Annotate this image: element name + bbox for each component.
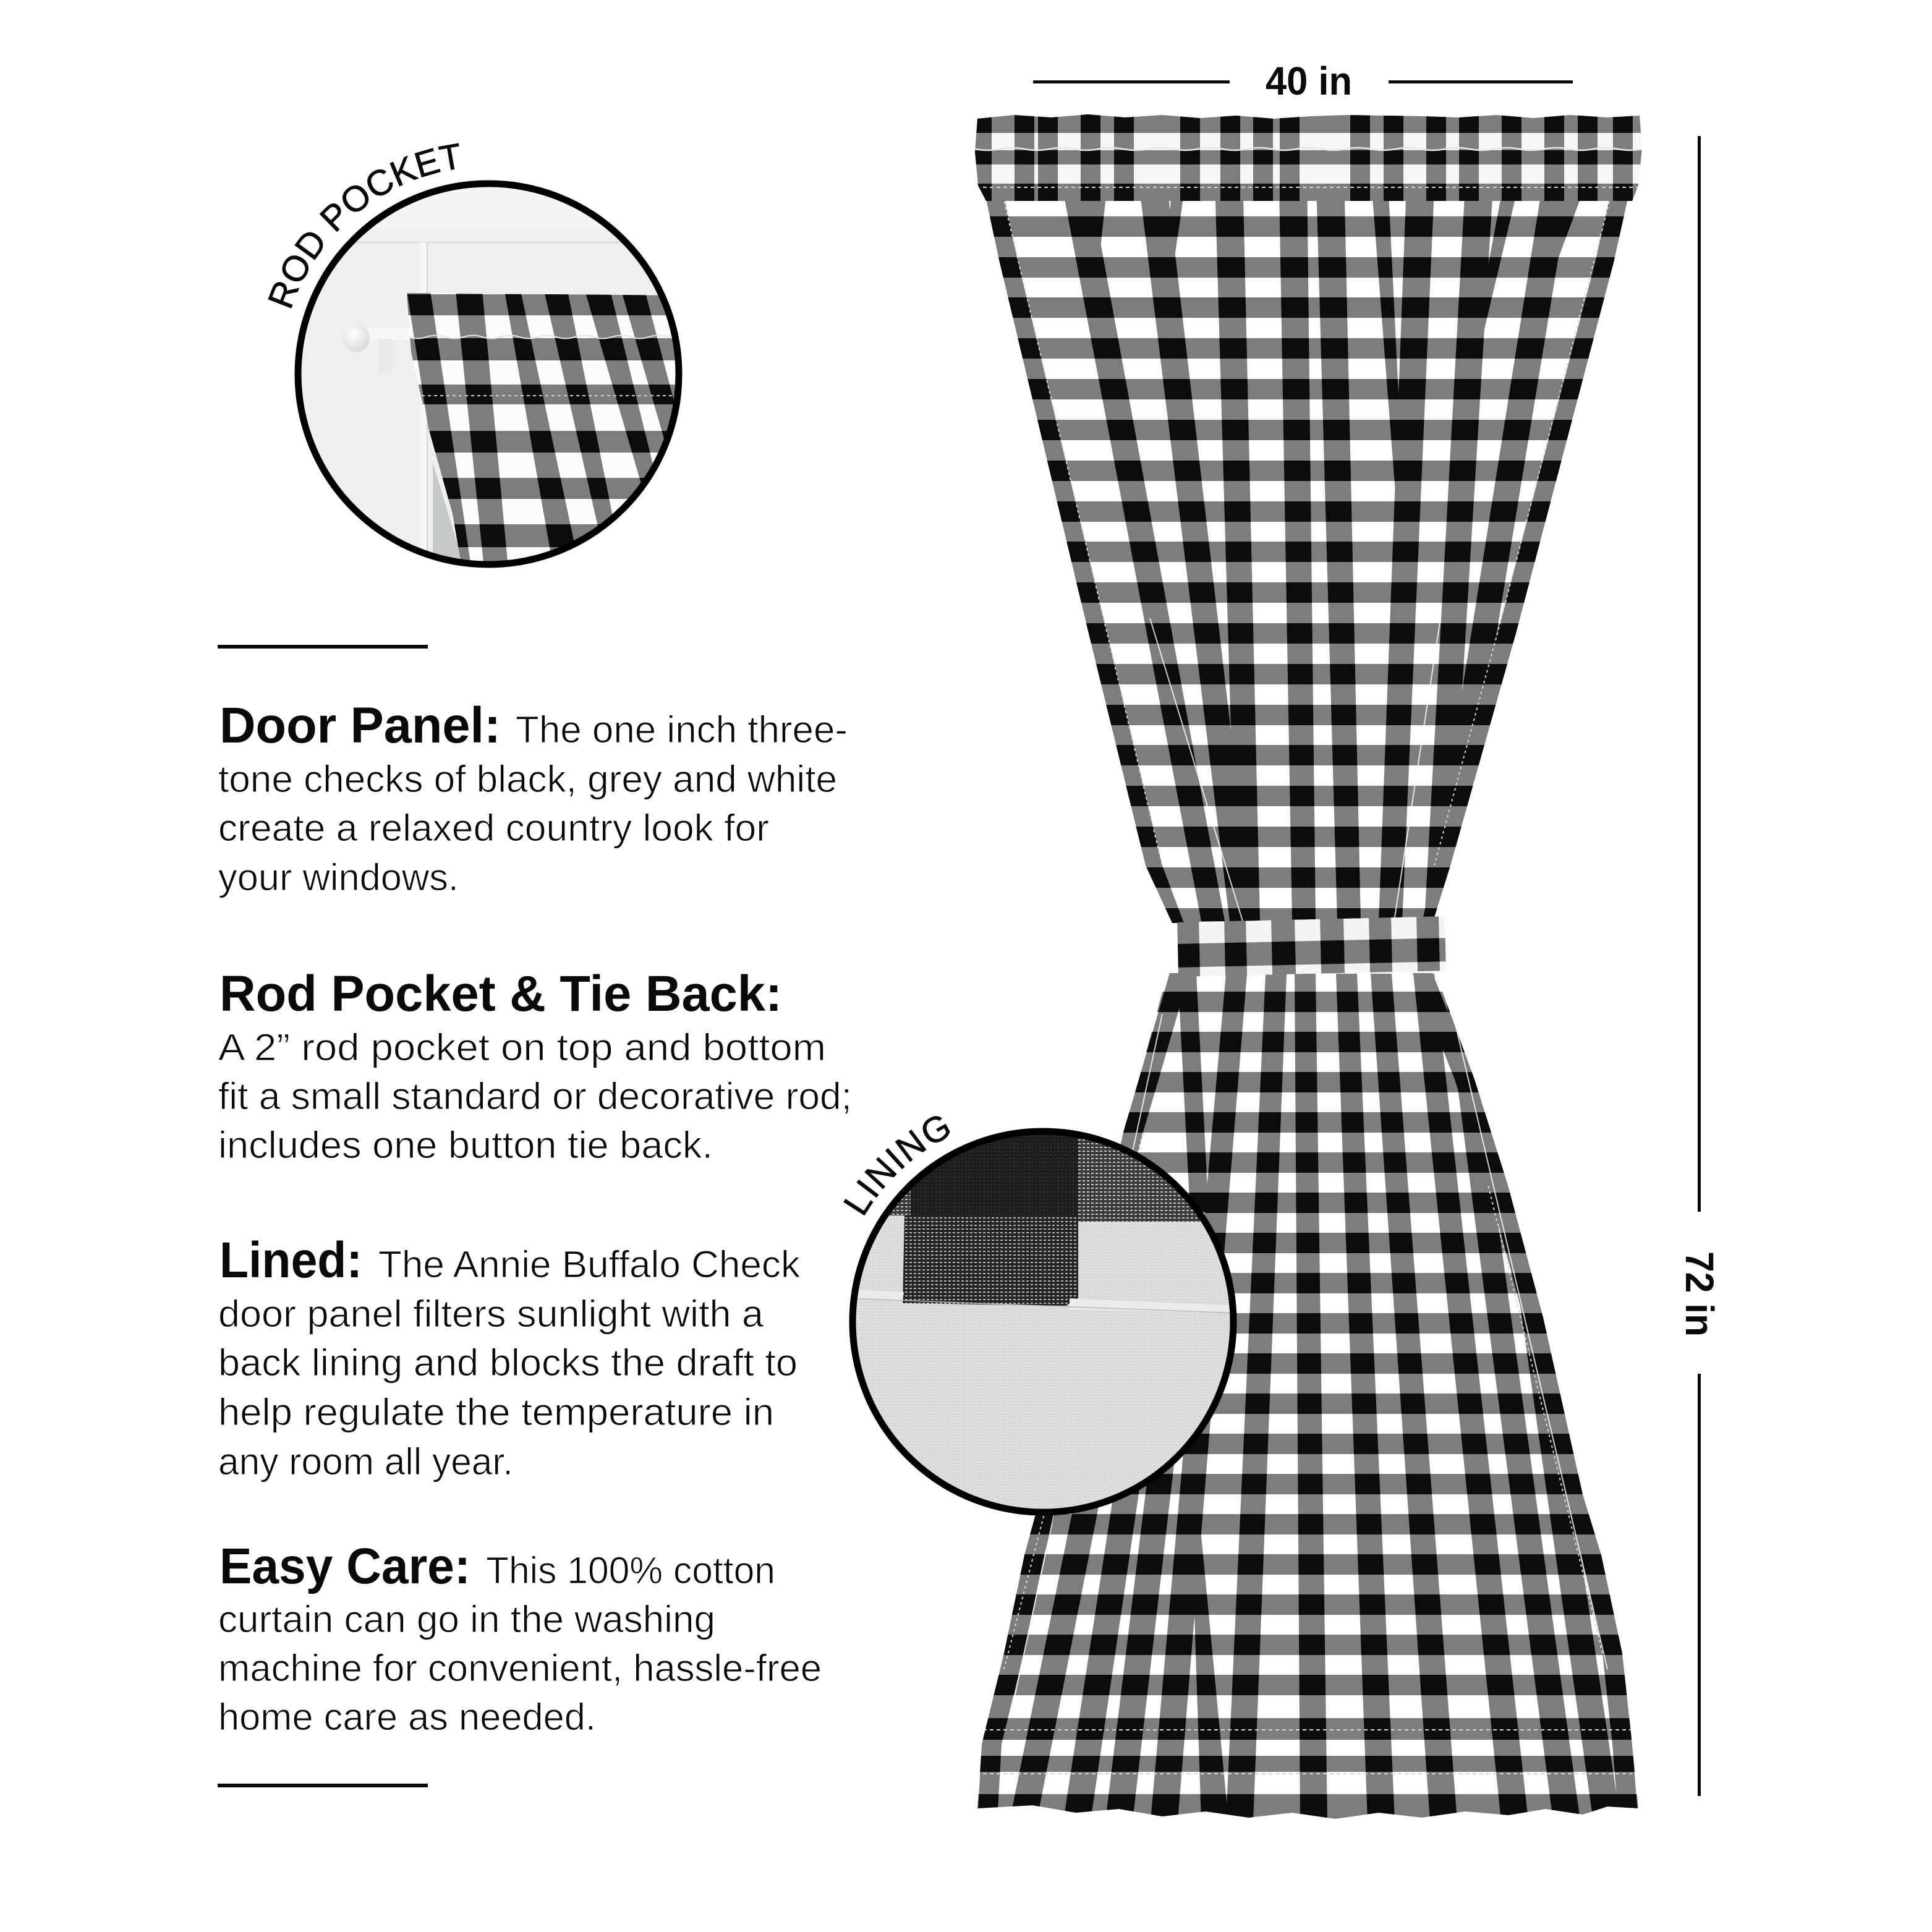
text block: lined: back lining and blocks the draft to: [218, 1342, 798, 1384]
text block: door panel: create a relaxed country look for: [218, 807, 769, 849]
text block: easy care: home care as needed.: [218, 1696, 596, 1738]
divider: top rule: [218, 645, 428, 649]
text block: easy care: machine for convenient, hassle-free: [218, 1647, 822, 1689]
infographic canvas: [218, 66, 1715, 1819]
text block: door panel: [218, 697, 848, 898]
text block: rod pocket and tie back: [218, 966, 852, 1166]
text block: door panel: tone checks of black, grey and white: [218, 758, 837, 800]
text block: easy care: curtain can go in the washing: [218, 1598, 715, 1640]
width dimension: 40 in: 40 in: [1266, 59, 1352, 103]
callout: lining detail circle: [843, 1116, 1236, 1516]
text block: lined: help regulate the temperature in: [218, 1391, 774, 1433]
label: rod pocket: ROD POCKET: [268, 143, 459, 309]
text block: easy care: Easy Care:: [219, 1538, 470, 1594]
text block: easy care: [218, 1538, 822, 1738]
curtain panel, gingham: [927, 108, 1706, 1830]
curtain lower section below the tie back: [977, 973, 1638, 1819]
width dimension: 40 in: [1033, 59, 1573, 103]
text block: lined: [218, 1232, 800, 1483]
text block: door panel: The one inch three-: [516, 709, 848, 751]
text block: rod pocket and tie back: Rod Pocket & Tie Back:: [219, 966, 782, 1022]
text block: door panel: Door Panel:: [219, 697, 501, 754]
curtain rod pocket heading at the top: [975, 114, 1642, 201]
curtain rod and finial: [343, 326, 411, 352]
height dimension: 72 in: 72 in: [1677, 1251, 1722, 1337]
callout: rod pocket detail circle: [268, 143, 683, 568]
divider: bottom rule: [218, 1784, 428, 1787]
miniature gingham curtain: [407, 293, 675, 561]
text block: lined: Lined:: [219, 1232, 362, 1288]
curtain upper section above the tie back: [987, 201, 1627, 923]
text block: rod pocket and tie back: fit a small standard or decorative rod;: [218, 1075, 852, 1117]
lining photo: [856, 1135, 1230, 1509]
text block: door panel: your windows.: [218, 856, 459, 898]
label: lining: LINING: [843, 1116, 950, 1215]
rod pocket photo: [302, 187, 675, 561]
tie back band: [1177, 916, 1446, 977]
text block: rod pocket and tie back: includes one button tie back.: [218, 1124, 713, 1166]
text block: lined: The Annie Buffalo Check: [378, 1243, 800, 1285]
height dimension: 72 in: [1677, 136, 1722, 1796]
text block: lined: door panel filters sunlight with a: [218, 1293, 764, 1335]
text block: rod pocket and tie back: A 2” rod pocket on top and bottom: [218, 1026, 826, 1068]
text block: lined: any room all year.: [218, 1440, 513, 1483]
text block: easy care: This 100% cotton: [486, 1549, 775, 1591]
